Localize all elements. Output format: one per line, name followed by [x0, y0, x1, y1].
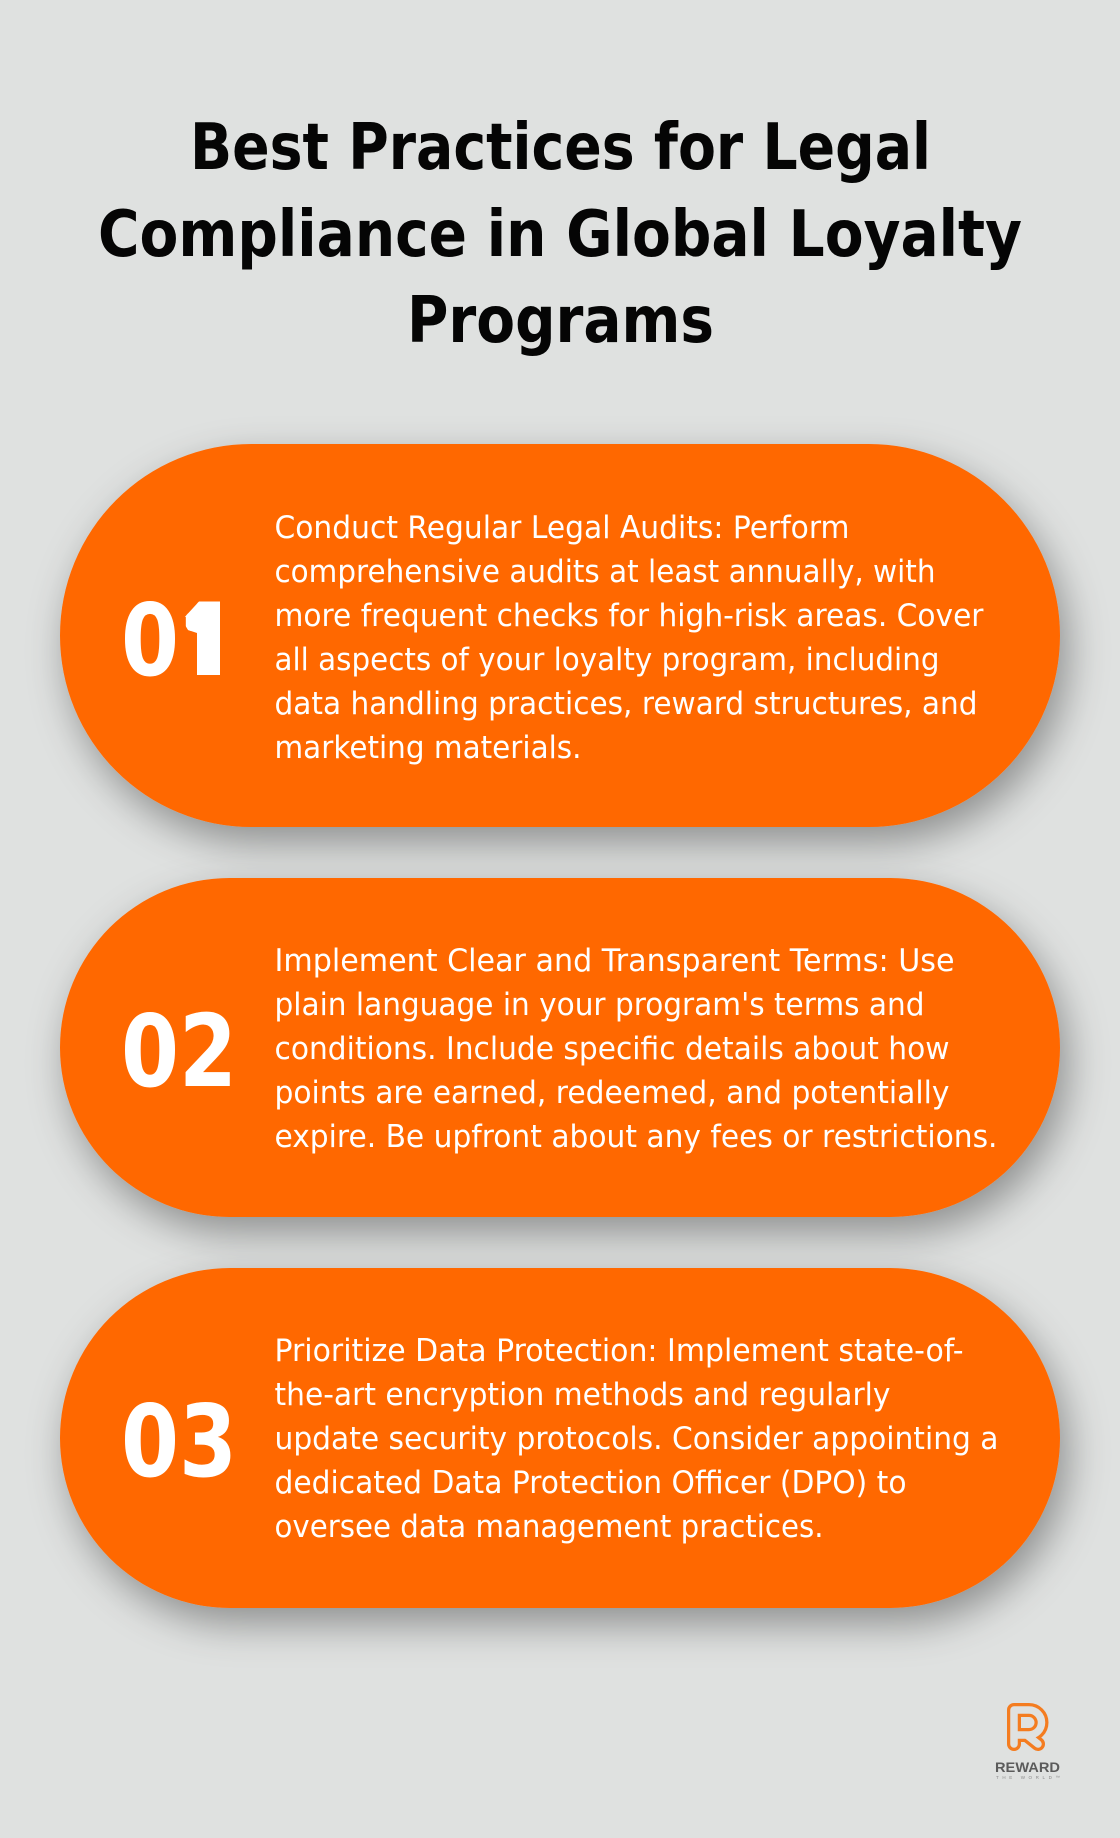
title: Best Practices for Legal: [190, 111, 931, 185]
panel: step 02 clear terms: [60, 878, 1060, 1217]
text block: step 02: Implement Clear and Transparent Terms: Use: [274, 943, 954, 979]
text block: step 01: Conduct Regular Legal Audits: Perform: [274, 510, 850, 546]
number: 01: 1: [142, 582, 256, 699]
logo: Reward the World: [995, 1710, 1060, 1780]
number: 03: 03: [121, 1383, 237, 1500]
panel background: step 03: [60, 1268, 1060, 1608]
title: Compliance in Global Loyalty: [98, 198, 1022, 272]
panel background: step 02: [60, 878, 1060, 1217]
text block: step 02: plain language in your program's terms and: [274, 987, 924, 1023]
text block: step 01: all aspects of your loyalty program, including: [274, 642, 940, 678]
wordmark: REWARD: REWARD: [995, 1759, 1060, 1775]
title: Programs: [407, 284, 714, 358]
text block: step 03: update security protocols. Consider appointing a: [274, 1421, 998, 1457]
text block: step 01: marketing materials.: [274, 730, 582, 766]
text block: step 03: the-art encryption methods and regularly: [274, 1377, 890, 1413]
title: [98, 111, 1022, 358]
number: 01: [125, 601, 220, 676]
number: 02: 02: [121, 993, 237, 1110]
panel: step 01 legal audits: [60, 444, 1060, 827]
text block: step 01: [274, 510, 984, 766]
icon: R mark: [1014, 1710, 1042, 1744]
text block: step 03: oversee data management practices.: [274, 1509, 824, 1545]
text block: step 01: data handling practices, reward structures, and: [274, 686, 978, 722]
text block: step 03: [274, 1333, 998, 1545]
text block: step 02: [274, 943, 998, 1155]
text block: step 01: more frequent checks for high-risk areas. Cover: [274, 598, 984, 634]
text block: step 01: comprehensive audits at least annually, with: [274, 554, 936, 590]
text block: step 03: dedicated Data Protection Officer (DPO) to: [274, 1465, 906, 1501]
panel: step 03 data protection: [60, 1268, 1060, 1608]
panel background: step 01: [60, 444, 1060, 827]
text block: step 02: conditions. Include specific details about how: [274, 1031, 950, 1067]
tagline: THE WORLD: THE WORLD™: [996, 1775, 1060, 1780]
number: 01: 0: [121, 582, 179, 699]
text block: step 02: points are earned, redeemed, and potentially: [274, 1075, 950, 1111]
text block: step 03: Prioritize Data Protection: Implement state-of-: [274, 1333, 964, 1369]
text block: step 02: expire. Be upfront about any fees or restrictions.: [274, 1119, 998, 1155]
